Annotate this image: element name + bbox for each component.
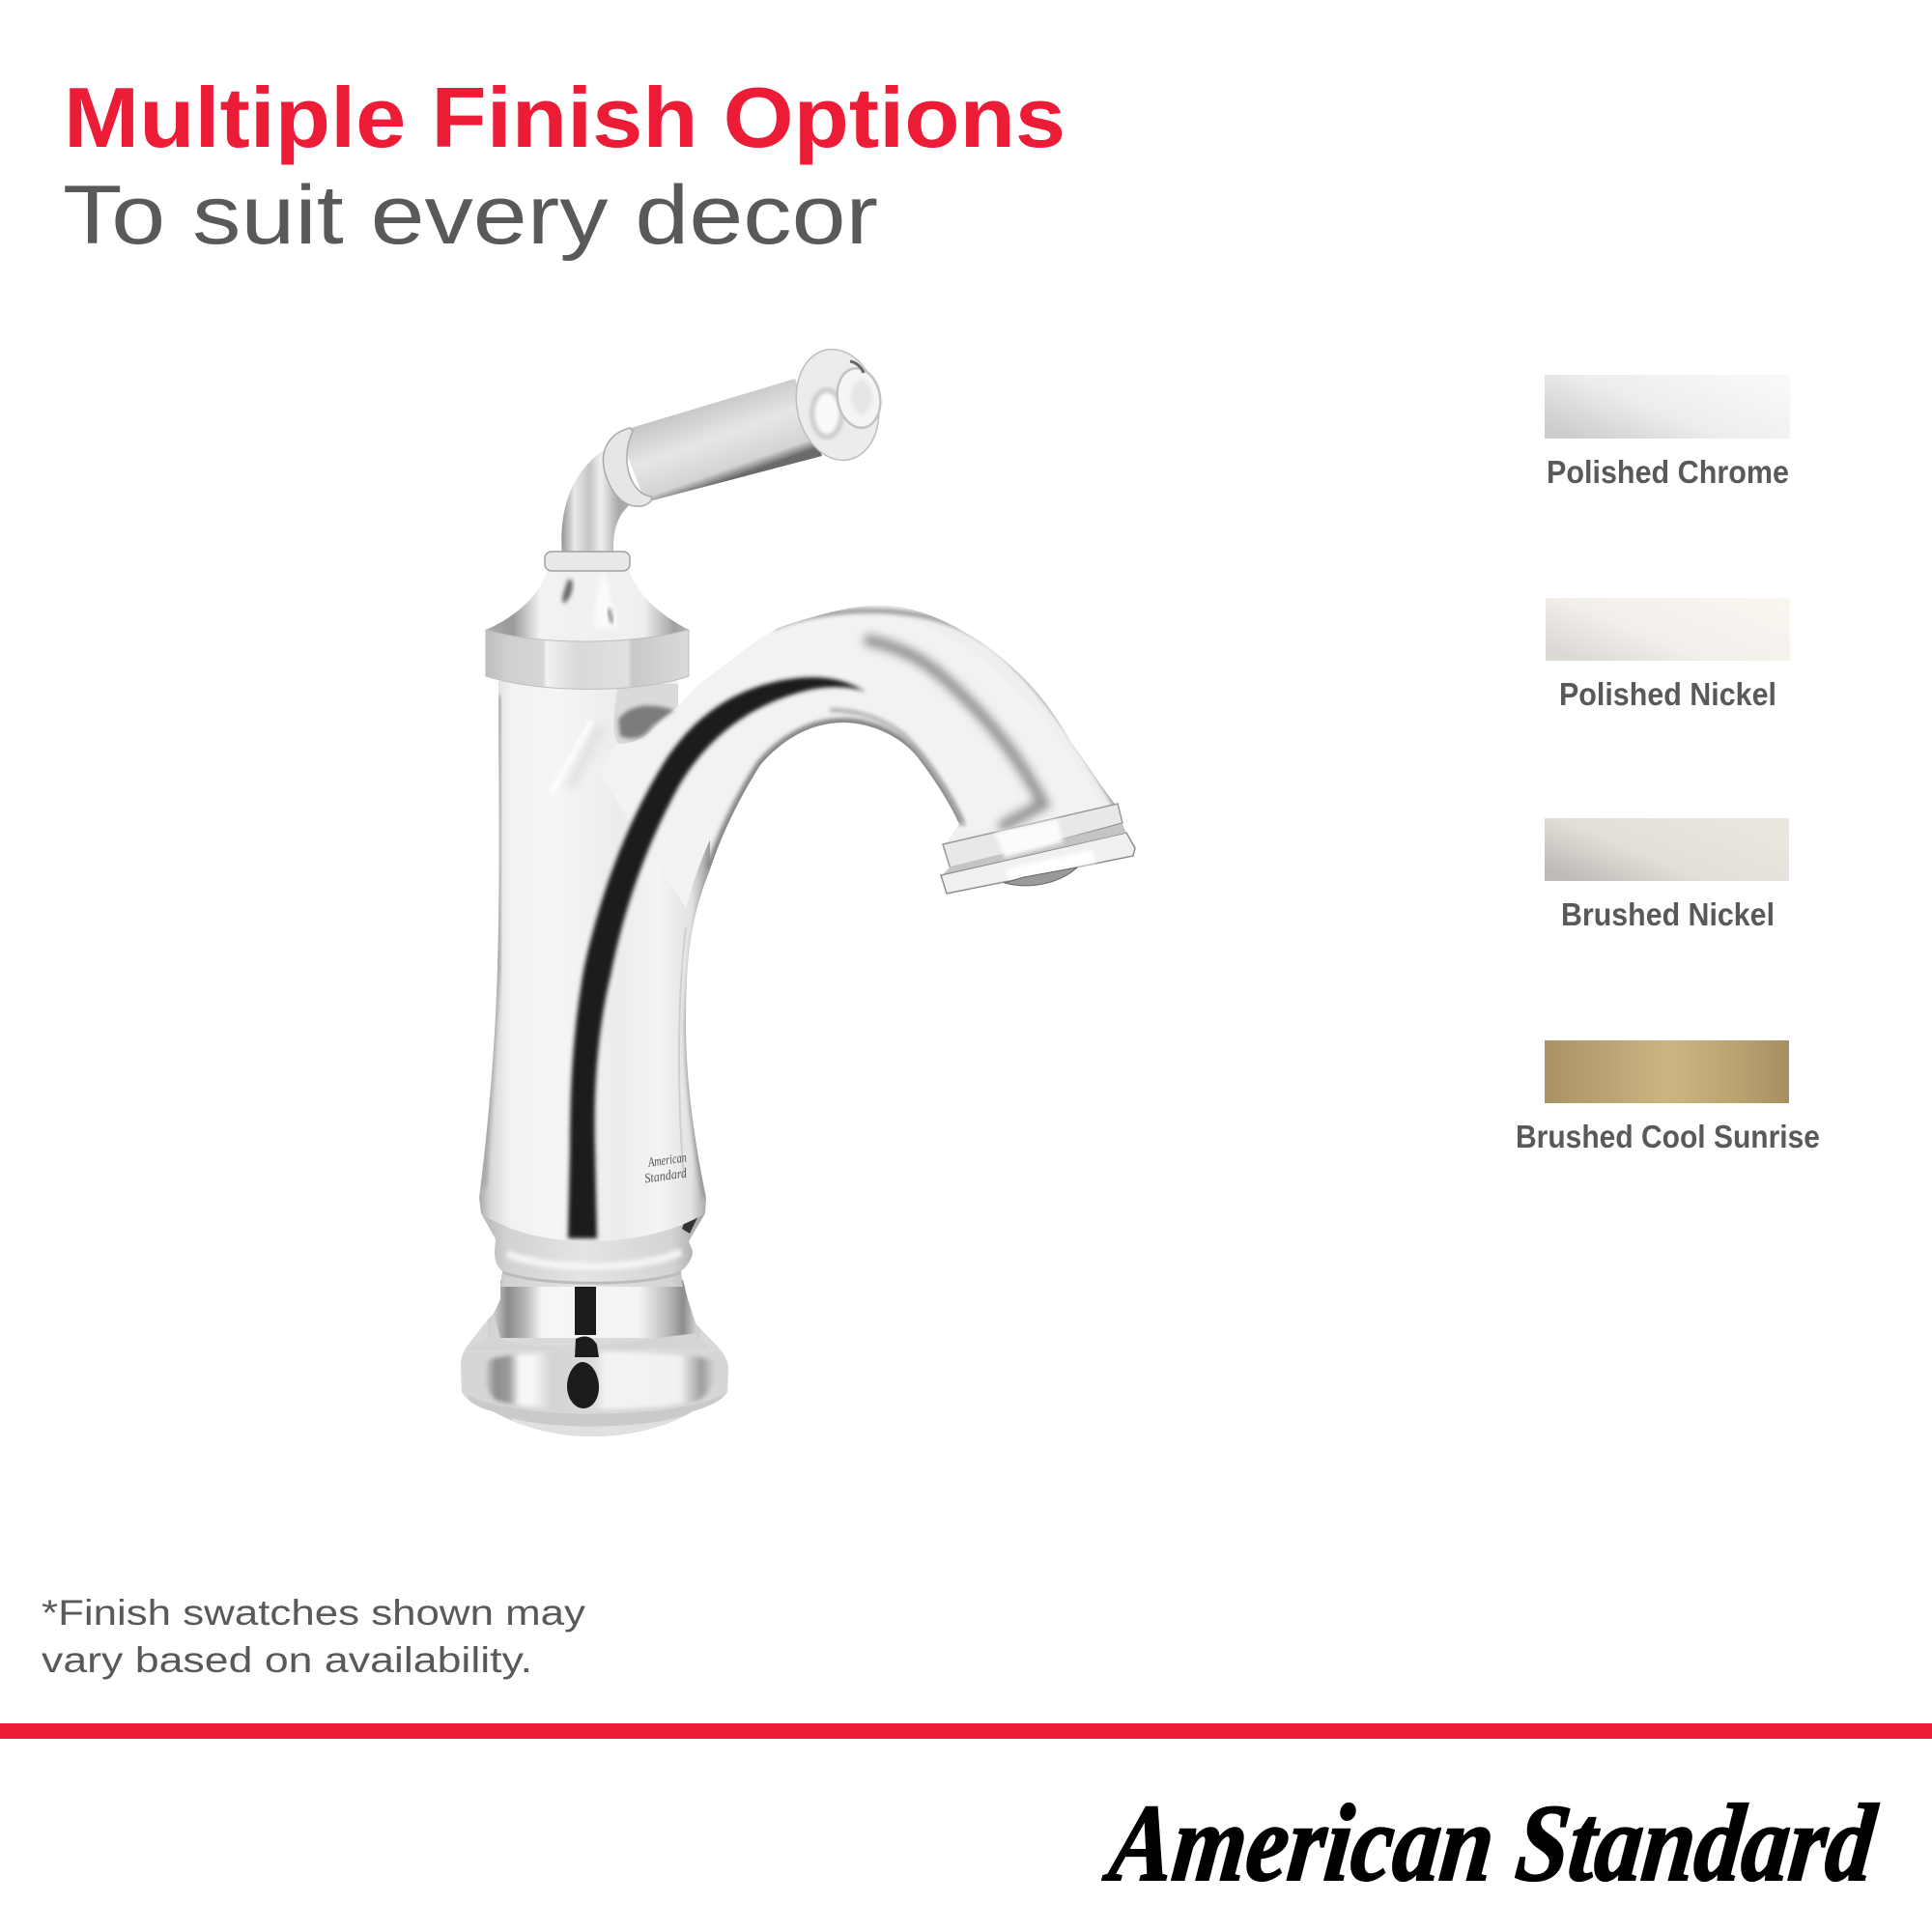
swatch: polished nickel: Polished Nickel [1559,676,1776,712]
faucet: engraved logo [641,1151,690,1186]
footnote: *Finish swatches shown may [42,1593,586,1633]
faucet illustration [454,342,1150,1439]
faucet: neck ring [481,1206,705,1287]
faucet: collar dome [486,567,689,647]
swatch: brushed cool sunrise [1516,1040,1820,1154]
faucet: handle knob [786,342,889,468]
faucet: collar band [486,630,689,690]
faucet: engraved logo: American [646,1151,688,1171]
swatch: brushed cool sunrise: Brushed Cool Sunrise [1516,1119,1820,1154]
faucet: nozzle [941,804,1135,894]
faucet: base [454,1275,734,1439]
title: Multiple Finish Options [64,70,1065,165]
panel: finish swatches [1516,375,1820,1154]
swatch: polished nickel [1546,598,1790,712]
faucet: handle lever [603,379,822,506]
faucet: base reflection [567,1277,599,1408]
faucet: dark reflection band [568,677,866,1238]
footnote [42,1593,586,1680]
swatch: polished chrome: Polished Chrome [1547,454,1789,490]
faucet: top ring [545,552,630,571]
faucet: handle stem [561,450,638,555]
footnote: vary based on availability. [42,1640,532,1680]
swatch: polished chrome [1545,375,1790,490]
faucet: under-collar reflection [613,684,678,744]
faucet: engraved logo: Standard [643,1166,689,1186]
swatch: brushed nickel [1545,818,1789,932]
subtitle: To suit every decor [63,169,878,262]
swatch: brushed nickel: Brushed Nickel [1561,896,1775,932]
faucet: spout and body [473,599,1150,1256]
red divider bar [0,1723,1932,1739]
